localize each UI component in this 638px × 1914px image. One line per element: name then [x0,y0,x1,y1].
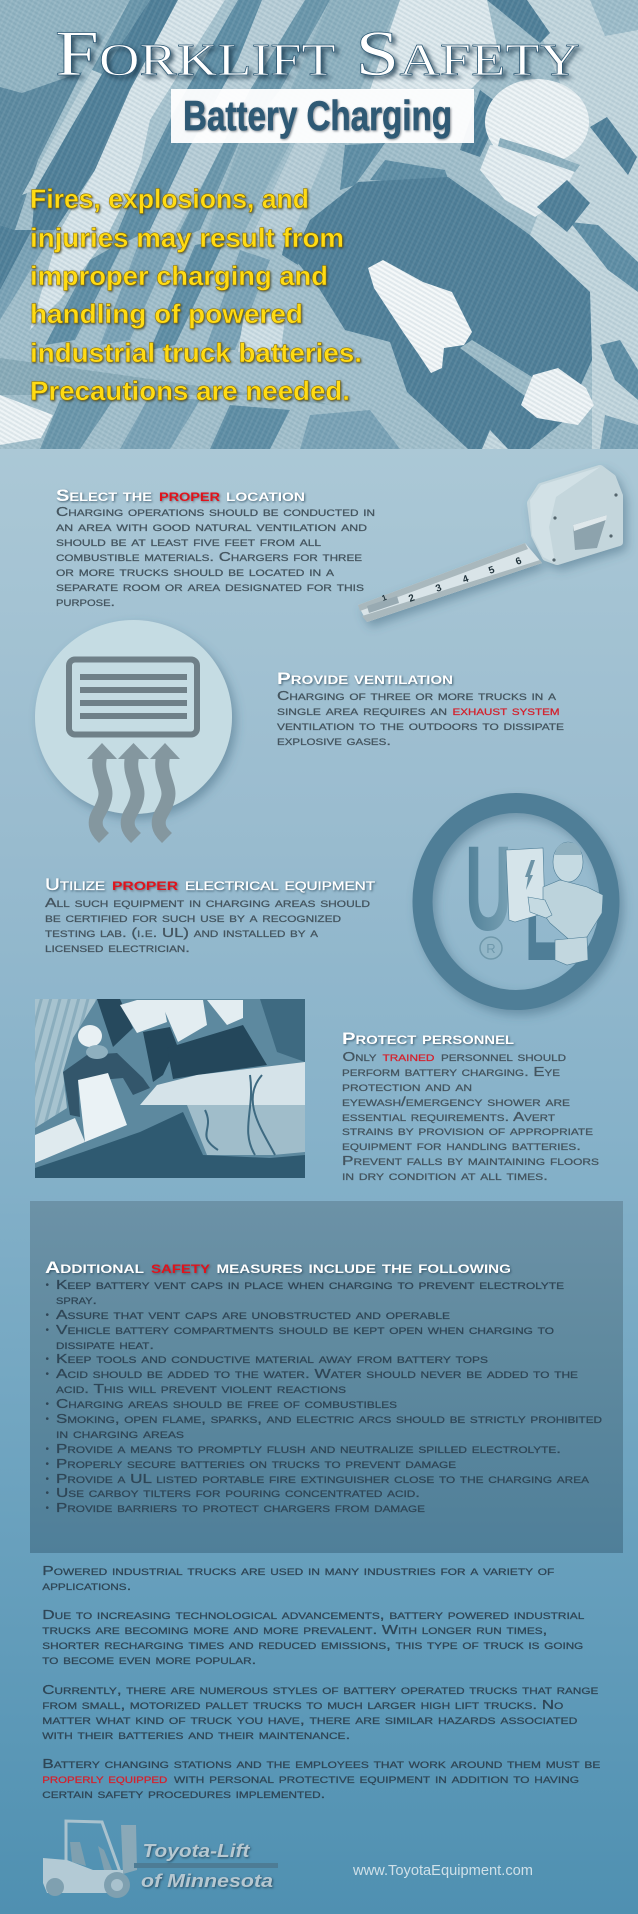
hero warning text: injuries may result from [30,223,344,253]
closing paragraphs: to become even more popular. [42,1652,256,1667]
title: Forklift Safety [55,18,580,90]
closing paragraphs: trucks are becoming more and more prevalent. With longer run times, [42,1622,547,1637]
bullet list: • [46,1459,50,1470]
closing paragraphs: Due to increasing technological advancements, battery powered industrial [42,1607,584,1622]
icon: tape measure: 6 [514,555,524,568]
bullet list: Keep battery vent caps in place when charging to prevent electrolyte [56,1277,564,1292]
registered mark [480,937,502,959]
logo text [141,1841,273,1891]
photo: worker at battery charging station [35,999,305,1178]
heading: Utilize [45,876,105,894]
helmet and face [485,79,589,165]
logo text: Toyota-Lift [142,1841,251,1861]
logo text: of Minnesota [141,1871,273,1891]
bullet list: Smoking, open flame, sparks, and electric arcs should be strictly prohibited [56,1411,603,1426]
bullet list: in charging areas [56,1426,184,1441]
body text: explosive gases. [277,733,391,748]
bullet list: Provide a means to promptly flush and neutralize spilled electrolyte. [56,1441,561,1456]
body text: protection and an [342,1079,472,1094]
icon: UL badge with electrician [422,803,610,1000]
bullet list: Use carboy tilters for pouring concentrated acid. [56,1485,420,1500]
body text: be certified for such use by a recognized [45,910,342,925]
panel background [30,1201,623,1553]
logo bar [134,1863,278,1868]
body text [277,688,564,748]
icon: tape measure: 3 [434,582,444,595]
vent grille [69,660,197,734]
closing paragraphs [42,1563,600,1801]
icon: tape measure: 1 [381,593,388,603]
body text: personnel should [441,1049,567,1064]
body text: or more trucks should be located in a [56,564,334,579]
bullet list: • [46,1369,50,1380]
closing paragraphs: Battery changing stations and the employees that work around them must be [42,1756,600,1771]
body text: separate room or area designated for this [56,579,364,594]
section: protect personnel [342,1030,599,1183]
right side panels [527,0,638,449]
body text: eyewash/emergency shower are [342,1094,570,1109]
icon: tape measure: 5 [487,564,497,577]
bullet list: Acid should be added to the water. Water should never be added to the [56,1366,578,1381]
body text: testing lab. (i.e. UL) and installed by a [45,925,318,940]
heading: proper [112,876,178,894]
panel: additional safety measures [30,1201,623,1553]
section: utilize proper electrical equipment [45,876,376,955]
bullet list: • [46,1399,50,1410]
bullet list: dissipate heat. [56,1337,154,1352]
body text: Charging of three or more trucks in a [277,688,556,703]
body text: licensed electrician. [45,940,190,955]
closing paragraphs: from small, motorized pallet trucks to much larger high lift trucks. No [42,1697,563,1712]
body text: strains by provision of appropriate [342,1123,593,1138]
hero warning text: industrial truck batteries. [30,338,362,368]
page background [0,449,638,1914]
icon: tape measure: 2 [407,592,417,605]
bullet list: Vehicle battery compartments should be kept open when charging to [56,1322,554,1337]
icon: tape measure [358,467,619,622]
closing paragraphs: certain safety procedures implemented. [42,1786,325,1801]
bullet list: • [46,1310,50,1321]
body text: Prevent falls by maintaining floors [342,1153,599,1168]
closing paragraphs: matter what kind of truck you have, there are similar hazards associated [42,1712,578,1727]
bullet list: • [46,1488,50,1499]
body text: Only [342,1049,376,1064]
body text: single area requires an [277,703,447,718]
closing paragraphs: properly equipped [42,1771,168,1786]
electrician [506,842,603,965]
hero warning text: handling of powered [30,299,303,329]
bullet list: spray. [56,1292,97,1307]
hero warning text [30,184,362,406]
hero warning text: Fires, explosions, and [30,184,309,214]
heading: Protect personnel [342,1030,514,1048]
icon: UL badge with electrician: L [525,818,557,994]
website url: www.ToyotaEquipment.com [352,1862,533,1879]
gloves and tool [460,340,545,402]
bullet list: Keep tools and conductive material away from battery tops [56,1351,488,1366]
circle backdrop [35,620,232,814]
section: select the proper location [56,487,375,609]
closing paragraphs: shorter recharging times and reduced emissions, this type of truck is going [42,1637,583,1652]
heading: safety [151,1259,210,1277]
bullet list: • [46,1474,50,1485]
bullet list: • [46,1503,50,1514]
body text: in dry condition at all times. [342,1168,548,1183]
closing paragraphs: Powered industrial trucks are used in many industries for a variety of [42,1563,555,1578]
body text: All such equipment in charging areas should [45,895,371,910]
bullet list: acid. This will prevent violent reactions [56,1381,346,1396]
heading: Provide ventilation [277,670,453,688]
UL letters: U [465,820,512,956]
body text: ventilation to the outdoors to dissipate [277,718,564,733]
body text: an area with good natural ventilation and [56,519,368,534]
body text [56,504,375,609]
body text: essential requirements. Avert [342,1109,556,1124]
heading: location [226,487,305,505]
bullet list: Charging areas should be free of combustibles [56,1396,397,1411]
bullet list: • [46,1325,50,1336]
heading: proper [159,487,220,505]
body text: equipment for handling batteries. [342,1138,581,1153]
bullet list: • [46,1444,50,1455]
body text [45,895,371,955]
heading [56,487,305,505]
body text: trained [382,1049,435,1064]
subtitle box: Battery Charging [183,92,452,139]
body text: combustible materials. Chargers for three [56,549,362,564]
icon: ventilation grille with rising air [35,620,232,838]
bullet list: • [46,1354,50,1365]
heading [45,1259,511,1277]
heading: Select the [56,487,152,505]
lower-left streaks [0,225,32,290]
bullet list: • [46,1414,50,1425]
bullet list: Properly secure batteries on trucks to prevent damage [56,1456,456,1471]
bullet list: Provide barriers to protect chargers from damage [56,1500,425,1515]
closing paragraphs: with personal protective equipment in addition to having [174,1771,579,1786]
bullet list: Provide a UL listed portable fire extinguisher close to the charging area [56,1471,589,1486]
closing paragraphs: applications. [42,1578,131,1593]
body text: should be at least five feet from all [56,534,321,549]
hero photo: worker handling a battery [0,0,638,449]
icon: forklift [43,1821,137,1898]
heading: measures include the following [216,1259,511,1277]
bullet list: Assure that vent caps are unobstructed and operable [56,1307,450,1322]
closing paragraphs: Currently, there are numerous styles of battery operated trucks that range [42,1682,598,1697]
heading: Additional [45,1259,144,1277]
section: provide ventilation [277,670,564,748]
heading [45,876,376,894]
dark torso [293,177,592,449]
closing paragraphs: with their batteries and their maintenance. [42,1727,350,1742]
body text [342,1049,599,1183]
bullet list [46,1277,603,1515]
hero warning text: Precautions are needed. [30,376,350,406]
hero warning text: improper charging and [30,261,328,291]
body text: exhaust system [452,703,560,718]
heading: electrical equipment [185,876,376,894]
body text: Charging operations should be conducted in [56,504,375,519]
registered mark: R [486,941,496,956]
rising air arrows [87,743,180,838]
bullet list: • [46,1280,50,1291]
body text: perform battery charging. Eye [342,1064,560,1079]
body text: purpose. [56,594,115,609]
logo: Toyota-Lift of Minnesota [43,1821,278,1898]
ring [422,803,610,1000]
icon: tape measure: 4 [461,573,471,586]
